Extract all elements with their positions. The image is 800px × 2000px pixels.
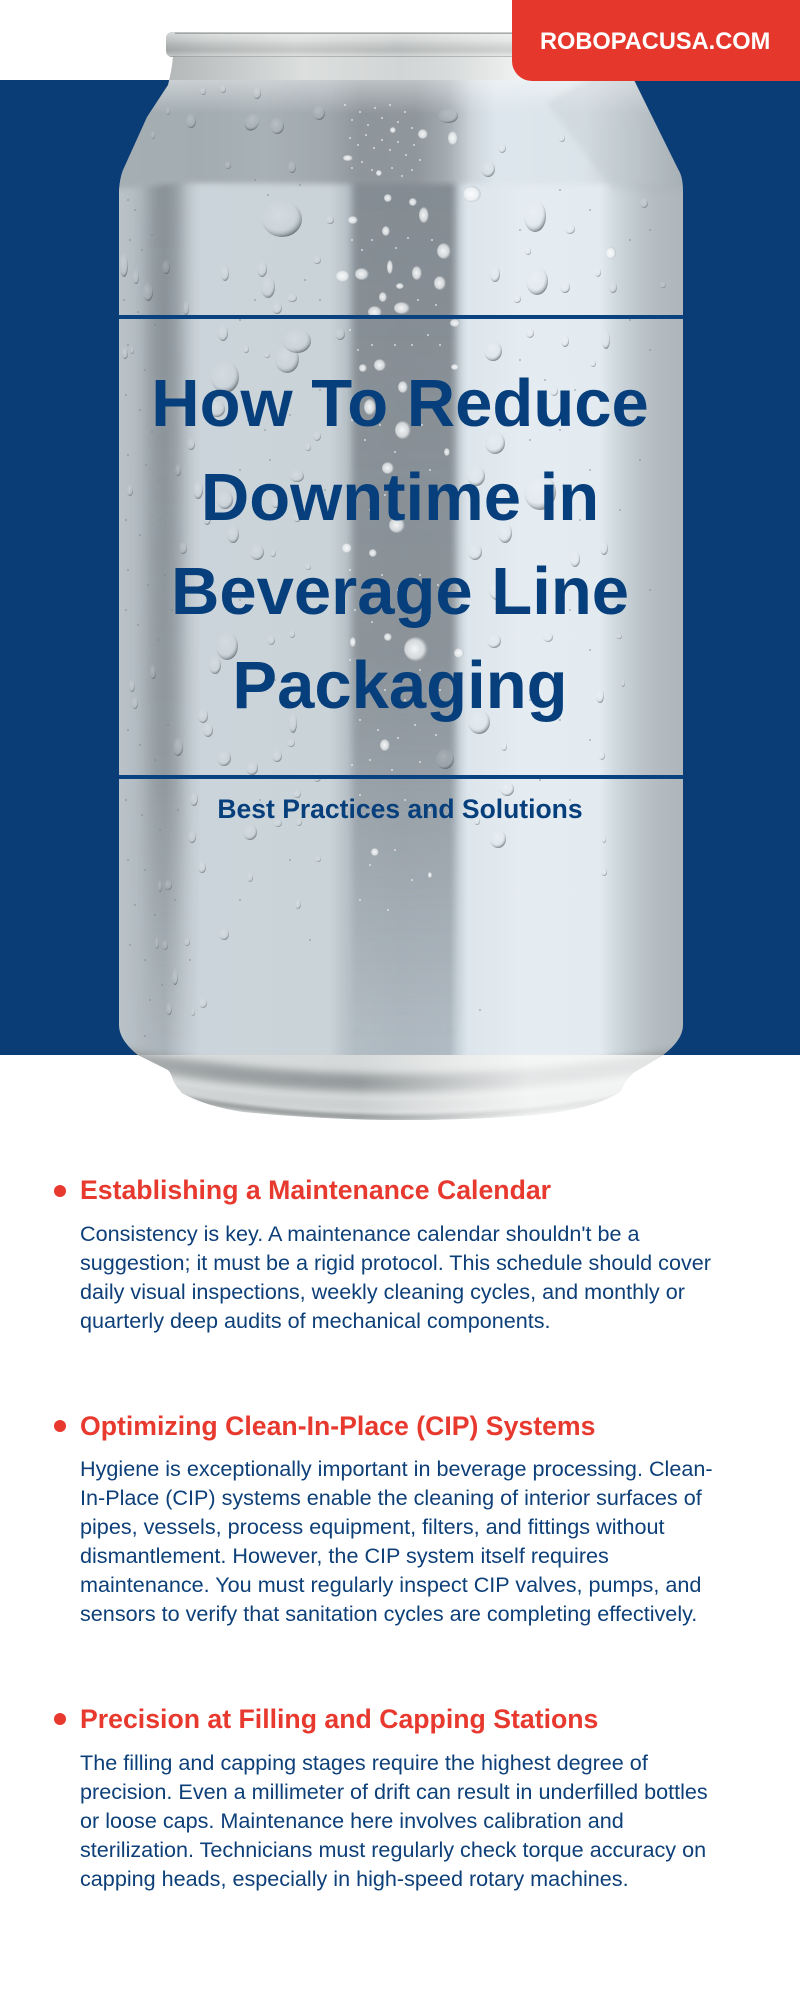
body text: capping heads, especially in high-speed rotary machines. (80, 1866, 629, 1891)
body text: sensors to verify that sanitation cycles are completing effectively. (80, 1601, 697, 1626)
body text: or loose caps. Maintenance here involves calibration and (80, 1808, 624, 1833)
body text: suggestion; it must be a rigid protocol. This schedule should cover (80, 1250, 711, 1275)
body text: pipes, vessels, process equipment, filters, and fittings without (80, 1514, 665, 1539)
small condensation specks (345, 105, 445, 910)
body text: The filling and capping stages require the highest degree of (80, 1750, 648, 1775)
top rule (119, 315, 683, 319)
bullet (54, 1713, 66, 1725)
body text: Hygiene is exceptionally important in beverage processing. Clean- (80, 1456, 713, 1481)
body text: dismantlement. However, the CIP system itself requires (80, 1543, 609, 1568)
heading: Establishing a Maintenance Calendar (80, 1175, 551, 1205)
title: Downtime in (201, 460, 599, 535)
section: maintenance calendar (54, 1175, 711, 1333)
body text (80, 1221, 711, 1333)
bottom rule (119, 775, 683, 779)
title (151, 366, 649, 723)
body text: In-Place (CIP) systems enable the cleaning of interior surfaces of (80, 1485, 702, 1510)
body text: maintenance. You must regularly inspect CIP valves, pumps, and (80, 1572, 701, 1597)
title: How To Reduce (151, 366, 649, 441)
heading: Optimizing Clean-In-Place (CIP) Systems (80, 1411, 595, 1441)
badge: website (512, 0, 800, 81)
website url: ROBOPACUSA.COM (540, 29, 770, 55)
bullet (54, 1185, 66, 1197)
water droplets (120, 85, 666, 1036)
title: Beverage Line (171, 554, 629, 629)
body text: daily visual inspections, weekly cleaning cycles, and monthly or (80, 1279, 685, 1304)
can rim (166, 32, 646, 57)
body text: sterilization. Technicians must regularly check torque accuracy on (80, 1837, 706, 1862)
section: filling and capping (54, 1704, 708, 1891)
body text: Consistency is key. A maintenance calendar shouldn't be a (80, 1221, 640, 1246)
navy hero band (0, 80, 800, 1055)
can body shading (100, 50, 700, 1125)
body text: precision. Even a millimeter of drift can result in underfilled bottles (80, 1779, 708, 1804)
body text: quarterly deep audits of mechanical components. (80, 1308, 551, 1333)
icon: aluminium beverage can with water droplets (119, 32, 683, 1120)
body text (80, 1750, 708, 1891)
body text (80, 1456, 713, 1626)
title: Packaging (232, 648, 568, 723)
heading: Precision at Filling and Capping Stations (80, 1704, 598, 1734)
section: clean-in-place systems (54, 1411, 713, 1626)
bullet (54, 1420, 66, 1432)
subtitle: Best Practices and Solutions (217, 794, 583, 824)
